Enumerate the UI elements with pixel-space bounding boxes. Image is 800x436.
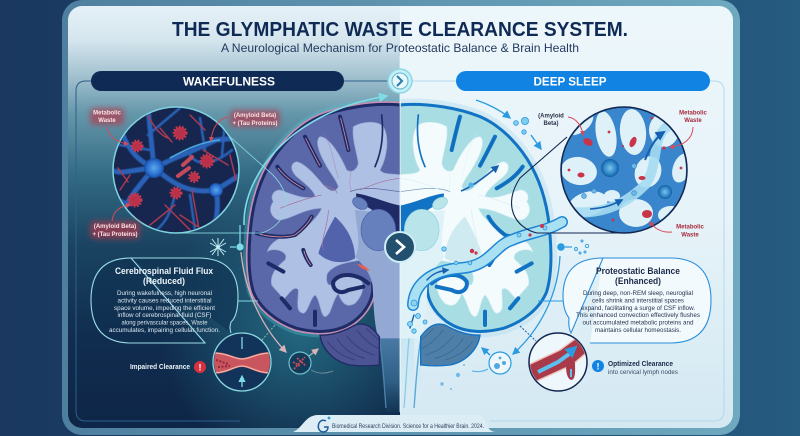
label: amyloid beta: (Amyloid — [538, 114, 564, 120]
callout: proteostatic balance: out accumulated metabolic proteins and — [582, 320, 694, 326]
callout: cerebrospinal fluid flux: activity causes reduced interstitial — [118, 298, 212, 304]
callout: proteostatic balance: Proteostatic Balance — [596, 266, 680, 277]
callout: cerebrospinal fluid flux: During wakefulness, high neuronal — [117, 290, 212, 297]
callout: cerebrospinal fluid flux: inflow of cerebrospinal fluid (CSF) — [118, 312, 212, 319]
callout: proteostatic balance: expand, facilitating a surge of CSF inflow. — [581, 305, 695, 312]
callout: proteostatic balance: maintains cellular homeostasis. — [595, 327, 681, 334]
label: metabolic waste: Metabolic — [93, 110, 121, 116]
waste fibres — [118, 115, 236, 235]
callout: cerebrospinal fluid flux — [91, 258, 258, 343]
magnified neurons: deep sleep — [558, 103, 696, 233]
label: amyloid beta and tau lower: (Amyloid Beta) — [94, 224, 136, 230]
callout: cerebrospinal fluid flux: space volume, impeding the efficient — [114, 305, 215, 312]
arrow: clearance route — [241, 252, 286, 352]
panel: deep sleep — [399, 71, 724, 421]
arrows: top inflow — [476, 100, 541, 149]
footer tab: Biomedical Research Division. Science for a Healthier Brain. 2024. — [332, 424, 484, 430]
callout: cerebrospinal fluid flux: accumulates, impairing cellular function. — [109, 327, 220, 334]
label: amyloid beta — [538, 114, 583, 135]
brain: wakefulness hemisphere — [249, 104, 401, 412]
footer tab — [293, 415, 496, 432]
magnifier connector — [176, 135, 286, 233]
label: metabolic waste lower: Metabolic — [676, 224, 704, 230]
fluid channels — [570, 125, 670, 213]
neuron cell bodies — [144, 158, 164, 178]
label: amyloid beta and tau: (Amyloid Beta) — [234, 113, 276, 119]
callout: proteostatic balance: (Enhanced) — [615, 276, 661, 287]
brain stem — [380, 338, 400, 410]
callout: proteostatic balance — [538, 258, 711, 343]
panel: wakefulness — [76, 71, 401, 421]
arrow: CSF inflow arc — [244, 96, 387, 225]
protein aggregates — [129, 127, 213, 206]
impaired clearance label — [130, 361, 206, 373]
magnifier connector — [512, 137, 624, 233]
wakefulness heading: WAKEFULNESS — [183, 76, 275, 88]
callout: proteostatic balance: During deep, non-REM sleep, neuroglial — [583, 290, 693, 297]
impaired clearance label: Impaired Clearance — [130, 364, 190, 371]
label: metabolic waste upper: Metabolic — [679, 110, 707, 116]
label: amyloid beta: Beta) — [543, 121, 559, 127]
vessel: dilated — [520, 326, 592, 391]
magnified neurons: wakefulness — [112, 107, 240, 240]
optimized clearance label: Optimized Clearance — [608, 361, 673, 368]
optimized clearance label: into cervical lymph nodes — [608, 370, 678, 376]
brain: deep sleep hemisphere — [399, 104, 551, 412]
label: metabolic waste upper — [670, 110, 707, 147]
wakefulness heading — [91, 71, 344, 91]
icon: astrocyte star — [210, 238, 226, 256]
callout: proteostatic balance: This enhanced convection effectively flushes — [576, 312, 700, 319]
icon: center chevron — [385, 232, 415, 262]
title: THE GLYMPHATIC WASTE CLEARANCE SYSTEM. — [172, 18, 628, 41]
callout: cerebrospinal fluid flux: Cerebrospinal Fluid Flux — [115, 266, 214, 277]
deep sleep heading: DEEP SLEEP — [534, 76, 607, 88]
label: amyloid beta and tau lower — [90, 205, 140, 239]
label: amyloid beta and tau: + (Tau Proteins) — [232, 121, 278, 127]
arrow: clearance route — [513, 256, 560, 354]
connector dot — [230, 225, 244, 251]
label: metabolic waste upper: Waste — [684, 118, 702, 124]
red waste spots — [470, 224, 544, 255]
neuron branches — [114, 108, 238, 230]
icon: top chevron — [388, 69, 412, 93]
subtitle: A Neurological Mechanism for Proteostatic Balance & Brain Health — [221, 41, 579, 55]
label: metabolic waste lower — [650, 222, 704, 238]
icon: clearance node — [440, 348, 511, 390]
callout: proteostatic balance: cells shrink and interstitial spaces — [592, 298, 684, 304]
deep sleep heading — [456, 71, 710, 91]
impaired clearance label: ! — [198, 362, 202, 372]
label: metabolic waste — [90, 108, 128, 144]
brain stem — [401, 338, 421, 408]
center divider — [400, 56, 401, 412]
label: metabolic waste: Waste — [98, 118, 116, 124]
optimized clearance label: ! — [596, 362, 600, 372]
callout: cerebrospinal fluid flux: (Reduced) — [143, 276, 185, 287]
optimized clearance label — [592, 360, 678, 376]
arrow: cortex inflow — [461, 166, 498, 191]
vessel: constricted — [212, 325, 275, 391]
csf bubbles — [408, 226, 547, 333]
icon: logo — [318, 417, 330, 432]
callout: cerebrospinal fluid flux: along perivascular spaces. Waste — [122, 320, 208, 326]
label: amyloid beta and tau — [211, 110, 280, 141]
connector dot and bubbles — [557, 240, 589, 254]
csf stream — [410, 222, 562, 328]
label: amyloid beta and tau lower: + (Tau Proteins) — [92, 232, 138, 238]
label: metabolic waste lower: Waste — [681, 232, 699, 238]
small lesion on midbrain — [357, 264, 370, 271]
icon: waste node — [289, 349, 333, 374]
